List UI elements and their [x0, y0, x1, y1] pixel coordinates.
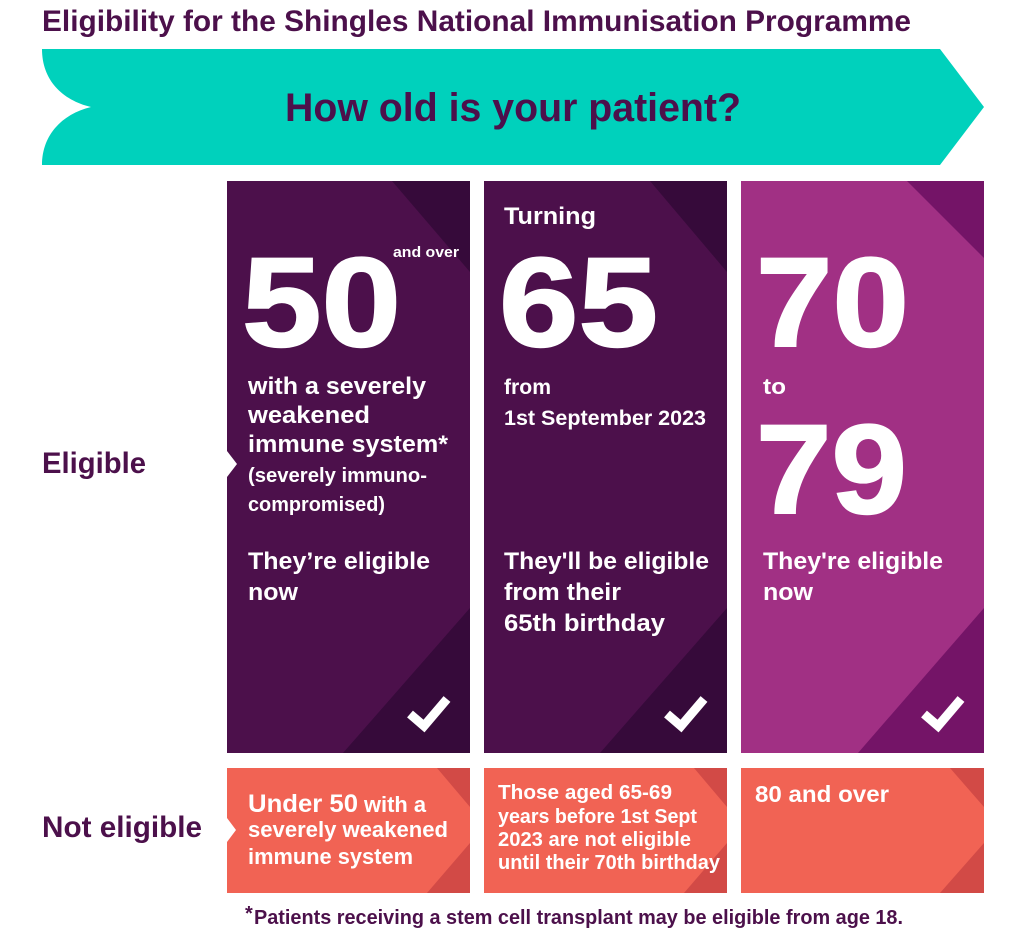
banner: how old is your patient — [42, 49, 984, 165]
panel: turning 65: 65 — [499, 231, 658, 373]
panel: turning 65: 1st September 2023 — [504, 407, 706, 430]
icon: tick — [667, 699, 704, 726]
footnote: Patients receiving a stem cell transplant may be eligible from age 18. — [254, 907, 903, 929]
panel: under 50 not eligible: severely weakened — [248, 817, 448, 842]
title: Eligibility for the Shingles National Immunisation Programme — [42, 5, 911, 38]
banner: how old is your patient: How old is your patient? — [285, 86, 741, 130]
row label: not eligible: Not eligible — [42, 811, 202, 844]
panel: turning 65: They'll be eligible — [504, 548, 709, 575]
panel: aged 65-69 not eligible: 2023 are not eligible — [498, 829, 691, 851]
panel: turning 65: from — [504, 376, 551, 399]
panel: 50 and over: weakened — [247, 402, 370, 429]
panel: 50 and over: 50 — [242, 231, 401, 373]
panel: aged 65-69 not eligible: years before 1st Sept — [498, 806, 697, 828]
icon: tick — [924, 699, 961, 726]
panel: turning 65 — [484, 181, 727, 753]
panel: 50 and over: They’re eligible — [248, 548, 430, 575]
panel: aged 65-69 not eligible: Those aged 65-69 — [498, 782, 672, 804]
panel: 50 and over: compromised) — [248, 493, 385, 516]
panel: 50 and over: now — [248, 579, 299, 606]
panel: 70 to 79: to — [763, 374, 786, 399]
panel: turning 65: 65th birthday — [504, 610, 665, 637]
panel: 80 and over not eligible — [741, 768, 984, 893]
panel: turning 65: from their — [504, 579, 621, 606]
panel: under 50 not eligible: immune system — [248, 844, 413, 869]
panel: under 50 not eligible: Under 50 — [248, 790, 358, 818]
panel: 50 and over: (severely immuno- — [248, 464, 427, 487]
panel: 70 to 79 — [741, 181, 984, 753]
panel: 50 and over: and over — [393, 244, 459, 261]
row label: eligible: Eligible — [42, 447, 146, 480]
panel: under 50 not eligible — [227, 768, 470, 893]
panel: 50 and over — [227, 181, 470, 753]
panel: aged 65-69 not eligible — [484, 768, 727, 893]
panel: 50 and over: immune system* — [248, 431, 448, 458]
panel: 70 to 79: They're eligible — [763, 548, 943, 575]
panel: under 50 not eligible: with a — [363, 792, 426, 817]
panel: turning 65: Turning — [504, 203, 596, 230]
footnote: * — [245, 903, 253, 925]
panel: 80 and over not eligible: 80 and over — [755, 781, 889, 807]
panel: 50 and over: with a severely — [247, 373, 426, 400]
panel: aged 65-69 not eligible: until their 70th birthday — [498, 852, 721, 874]
panel: 70 to 79: 79 — [756, 398, 907, 540]
icon: tick — [410, 699, 447, 726]
panel: 70 to 79: 70 — [756, 231, 909, 373]
panel: 70 to 79: now — [763, 579, 814, 606]
